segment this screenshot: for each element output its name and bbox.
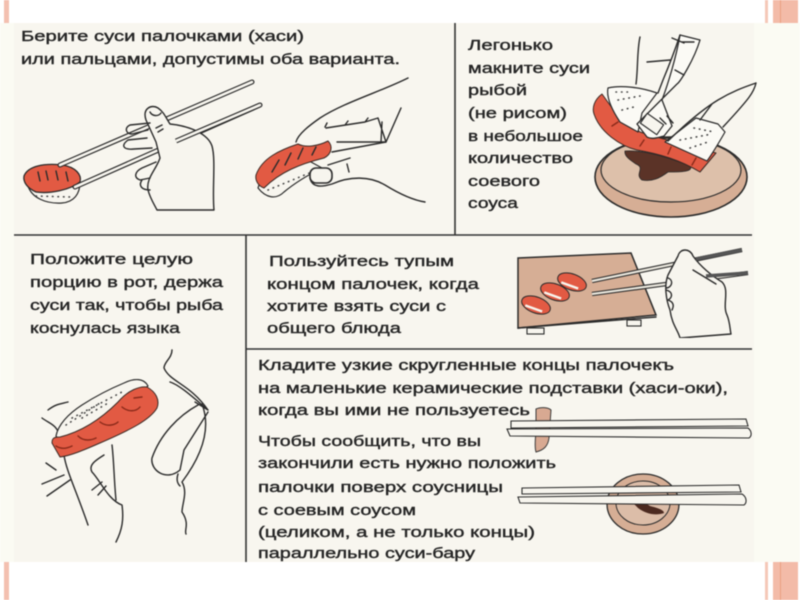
text: dip instructions: в небольшое <box>468 128 583 145</box>
illustration: sushi held in fingers <box>42 380 158 542</box>
text: blunt end instructions: хотите взять суси с <box>267 298 447 315</box>
illustration: chopsticks across sauce dish <box>518 474 746 534</box>
decorative corner accent: bottom left <box>4 562 9 600</box>
text: dip instructions: (не рисом) <box>468 105 567 122</box>
illustration: wooden sushi tray <box>518 253 656 334</box>
illustration: hand dipping sushi <box>593 35 756 172</box>
text: dip instructions: Легонько <box>468 37 553 54</box>
text: finishing instructions: параллельно суси-бару <box>258 545 476 562</box>
panel: take sushi with chopsticks or fingers <box>21 28 425 210</box>
illustration: hand holding sushi with chopsticks <box>24 82 260 210</box>
heading: take sushi: или пальцами, допустимы оба варианта. <box>21 51 400 68</box>
text: chopstick rest instructions: Кладите узкие скругленные концы палочекъ <box>258 357 674 374</box>
text: dip instructions: рыбой <box>468 82 527 99</box>
decorative corner accent: top left <box>4 0 9 23</box>
text: mouth instructions <box>30 251 224 337</box>
illustration: three sushi pieces <box>519 269 589 318</box>
heading: take sushi: Берите суси палочками (хаси) <box>21 28 304 45</box>
text: chopstick rest instructions: на маленькие керамические подставки (хаси-оки), <box>258 380 728 397</box>
illustration: soy sauce bowl <box>595 137 747 217</box>
text: blunt end instructions: Пользуйтесь тупым <box>269 253 454 270</box>
text: chopstick rest instructions <box>258 357 728 419</box>
text: dip instructions: соевого <box>468 173 540 190</box>
panel: put whole piece in mouth <box>30 251 224 542</box>
text: finishing instructions: с соевым соусом <box>258 502 416 519</box>
text: dip instructions: количество <box>468 150 573 167</box>
panel: use blunt end of chopsticks <box>267 250 748 342</box>
text: dip instructions: соуса <box>468 195 519 212</box>
text: blunt end instructions <box>267 253 480 337</box>
illustration: chopsticks on ceramic rest <box>507 408 751 452</box>
text: mouth instructions: суси так, чтобы рыба <box>30 297 224 314</box>
decorative corner accent: top right <box>765 0 798 23</box>
text: mouth instructions: коснулась языка <box>30 320 181 337</box>
text: finishing instructions: закончили есть нужно положить <box>258 455 556 472</box>
illustration: hand with reversed chopsticks <box>592 250 748 342</box>
text: finishing instructions: (целиком, а не только концы) <box>258 524 535 541</box>
text: dip instructions: макните суси <box>468 60 590 77</box>
decorative corner accent: bottom right <box>765 562 798 600</box>
text: blunt end instructions: концом палочек, когда <box>267 276 480 293</box>
text: dip instructions <box>468 37 590 212</box>
heading: take sushi <box>21 28 400 68</box>
text: mouth instructions: Положите целую <box>30 251 193 268</box>
text: chopstick rest instructions: когда вы ими не пользуетесь <box>258 402 530 419</box>
panel: lightly dip sushi <box>468 35 756 217</box>
text: mouth instructions: порцию в рот, держа <box>30 274 224 291</box>
panel: chopstick rest and finishing etiquette <box>258 357 751 562</box>
text: finishing instructions: палочки поверх соусницы <box>258 479 503 496</box>
illustration: fingers holding sushi <box>256 78 425 202</box>
illustration: open mouth profile <box>152 350 208 534</box>
text: blunt end instructions: общего блюда <box>267 320 402 337</box>
text: finishing instructions <box>258 433 556 562</box>
text: finishing instructions: Чтобы сообщить, что вы <box>258 433 481 450</box>
